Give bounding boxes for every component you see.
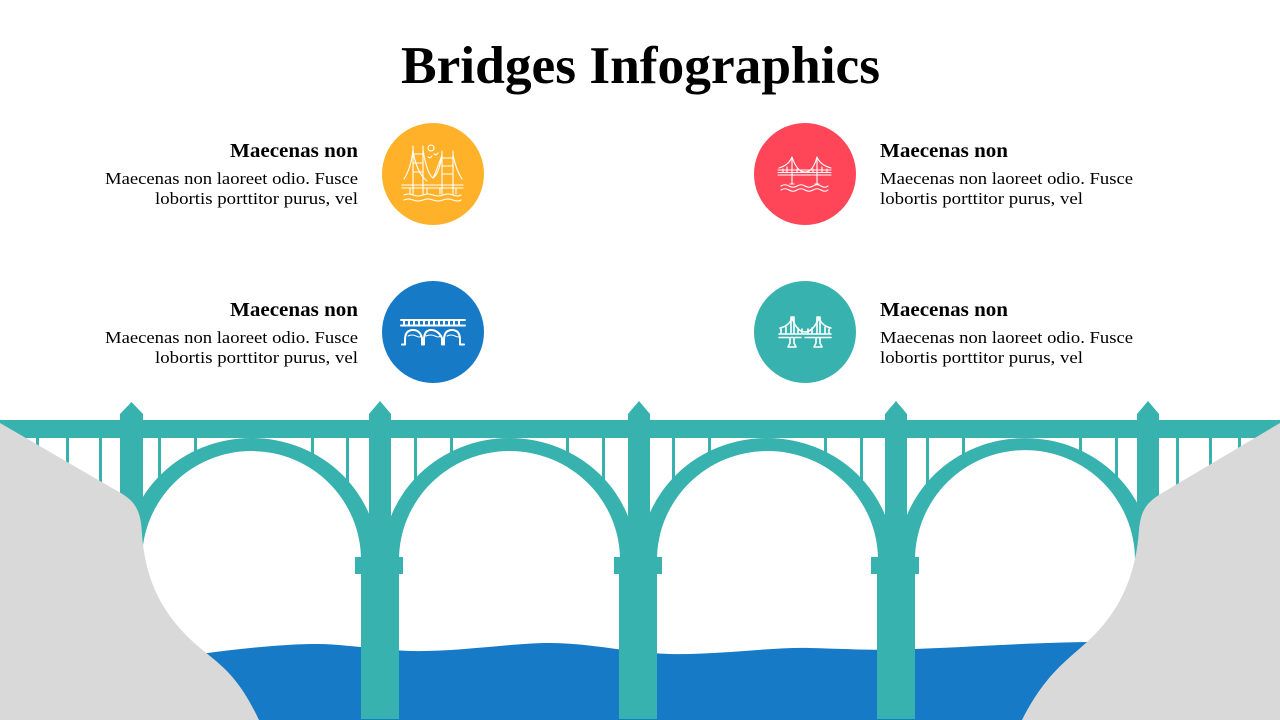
text block: Maecenas non laoreet odio. Fusce [105,169,358,188]
text block: Maecenas non laoreet odio. Fusce [105,328,358,347]
icon: teal suspension bridge [754,281,856,383]
arches [124,438,378,575]
text block [105,328,358,367]
heading: Maecenas non [230,299,358,321]
hangers [36,438,1241,498]
icon: red suspension bridge [754,123,856,225]
text block [880,328,1133,367]
heading: Maecenas non [880,299,1008,321]
title: Bridges Infographics [401,37,880,95]
water [200,642,1100,720]
icon: orange suspension bridge [382,123,484,225]
text block: lobortis porttitor purus, vel [880,189,1083,208]
panel: top right item [754,123,1133,225]
panel: top left item [105,123,484,225]
icon: blue arch bridge [382,281,484,383]
left cliff [0,423,259,720]
text block: lobortis porttitor purus, vel [155,348,358,367]
deck [0,420,1280,438]
piers [355,557,403,719]
text block: lobortis porttitor purus, vel [155,189,358,208]
text block [880,169,1133,208]
right cliff [1022,423,1280,720]
text block [105,169,358,208]
text block: Maecenas non laoreet odio. Fusce [880,169,1133,188]
bridge [0,401,1280,719]
text block: lobortis porttitor purus, vel [880,348,1083,367]
panel: bottom left item [105,281,484,383]
panel: bottom right item [754,281,1133,383]
posts [120,402,143,520]
heading: Maecenas non [230,140,358,162]
heading: Maecenas non [880,140,1008,162]
text block: Maecenas non laoreet odio. Fusce [880,328,1133,347]
